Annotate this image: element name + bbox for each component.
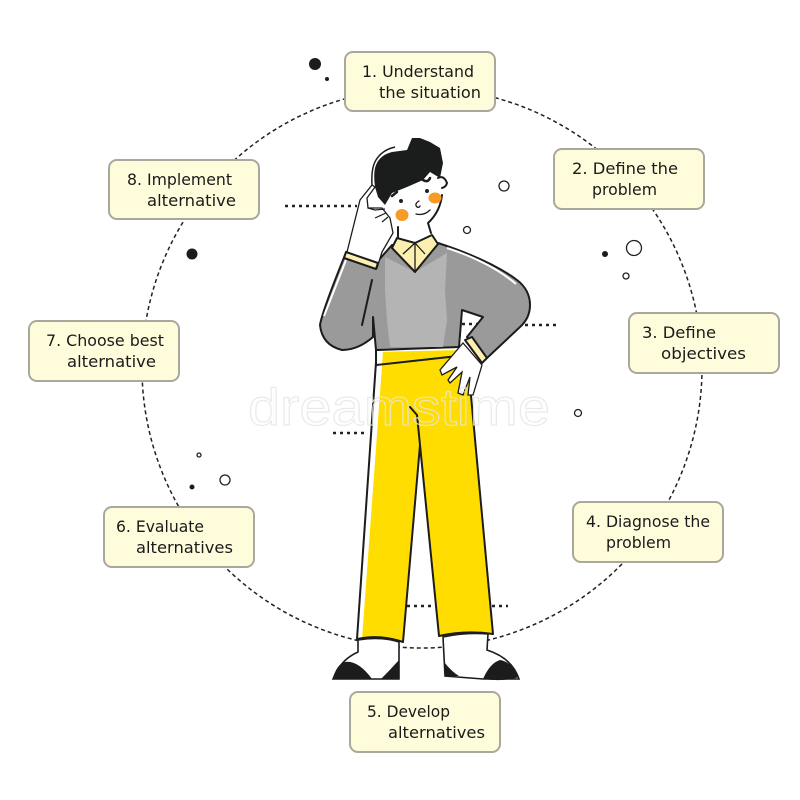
step 2 box: problem [592, 180, 657, 199]
step 2 box [554, 149, 704, 209]
step 6 box: 6. Evaluate [116, 517, 204, 536]
person [320, 138, 530, 680]
collar fold [403, 243, 425, 272]
cheek right [428, 192, 442, 204]
step 6 box: alternatives [136, 538, 233, 557]
collar [392, 235, 438, 272]
dotted accent lines [285, 206, 558, 606]
dashed cycle ring [142, 88, 702, 648]
white trouser edge [357, 350, 383, 639]
shoe: right [443, 633, 519, 680]
watermark: dreamstime [248, 379, 550, 437]
cuff: raised arm [344, 252, 378, 269]
sweater [320, 243, 530, 358]
step 7 box: 7. Choose best [46, 331, 164, 350]
step 3 box: 3. Define [642, 323, 716, 342]
sweater highlights [324, 248, 516, 316]
hair [374, 138, 443, 205]
decorative dots [186, 58, 642, 490]
step 5 box [350, 692, 500, 752]
trouser outlines [357, 347, 493, 642]
fingers [368, 208, 388, 222]
neck and face [390, 176, 447, 248]
step 5 box: alternatives [388, 723, 485, 742]
step 3 box: objectives [661, 344, 746, 363]
face details [392, 178, 430, 214]
step 1 box [345, 52, 495, 111]
cheek left [396, 209, 408, 221]
step 7 box: alternative [67, 352, 156, 371]
step 3 box [629, 313, 779, 373]
arm crease [362, 280, 372, 325]
step 4 box [573, 502, 723, 562]
raised hand and forearm [347, 185, 393, 268]
step 4 box: 4. Diagnose the [586, 512, 710, 531]
shoe: left [333, 638, 399, 679]
cuff: hip arm [465, 337, 487, 363]
step 7 box [29, 321, 179, 381]
trousers [358, 350, 493, 642]
hand on hip [440, 343, 482, 395]
hair outline arc [372, 147, 395, 185]
step 5 box: 5. Develop [367, 702, 450, 721]
step 8 box: 8. Implement [127, 170, 232, 189]
step 4 box: problem [606, 533, 671, 552]
step 8 box [109, 160, 259, 219]
step 1 box: the situation [379, 83, 481, 102]
step 2 box: 2. Define the [572, 159, 678, 178]
step 6 box [104, 507, 254, 567]
step 1 box: 1. Understand [362, 62, 474, 81]
sweater vest panel [385, 253, 447, 347]
step 8 box: alternative [147, 191, 236, 210]
